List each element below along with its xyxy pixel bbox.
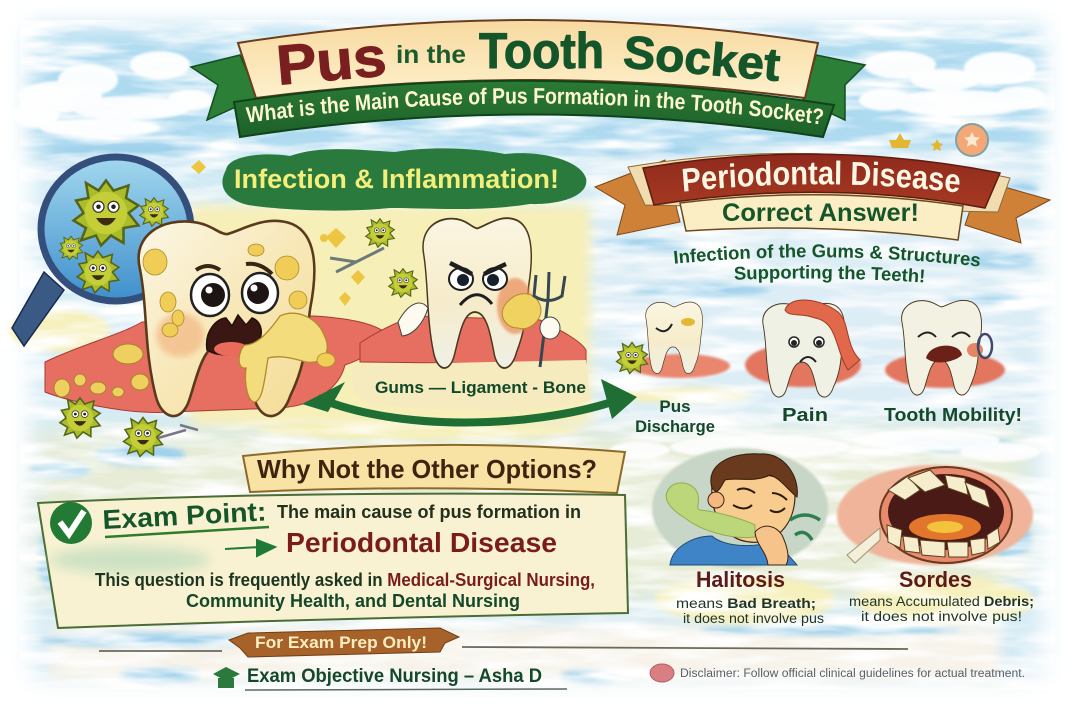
periodontal disease banner	[594, 152, 1052, 244]
angry tooth	[398, 218, 565, 368]
explanation text	[674, 244, 980, 283]
face	[712, 473, 795, 542]
ribbon tail left	[595, 160, 680, 235]
decorative stars and badge	[889, 124, 988, 156]
hand	[755, 526, 788, 565]
pink background	[837, 465, 1033, 565]
brows	[450, 263, 506, 274]
lip and mouth	[880, 467, 1012, 563]
heading text: Periodontal Disease	[682, 160, 960, 192]
title text: Tooth	[479, 23, 604, 79]
bacteria in lens	[59, 180, 168, 293]
pus spots	[143, 244, 335, 367]
cream plank	[680, 195, 963, 240]
halitosis illustration	[652, 448, 828, 568]
yellow sparkles	[191, 160, 365, 306]
disclaimer icon	[650, 664, 674, 682]
panel board	[38, 494, 628, 628]
underline	[105, 527, 269, 537]
hair	[711, 454, 797, 497]
sordes text	[849, 567, 1034, 624]
circle background	[652, 448, 828, 568]
clouds: top right	[859, 51, 1046, 116]
title text: Pus	[274, 24, 389, 97]
left arrowhead	[302, 382, 345, 412]
brows	[196, 264, 272, 274]
right arrowhead	[601, 379, 637, 419]
pus discharge label: Pus	[659, 397, 691, 416]
subtitle text: What is the Main Cause of Pus Formation in the Tooth Socket?	[246, 88, 824, 124]
right eye	[242, 273, 278, 313]
pus blob	[239, 313, 327, 402]
magnifier handle	[12, 272, 64, 346]
small bacteria bottom left	[60, 398, 198, 456]
title text: in the	[396, 41, 466, 69]
heading text: Infection & Inflammation!	[234, 164, 559, 194]
ribbon tail right	[965, 180, 1050, 243]
tooth body	[423, 218, 531, 368]
red board	[643, 154, 1000, 208]
arrow	[225, 540, 275, 556]
sordes text: it does not involve pus!	[861, 609, 1022, 624]
ribbon tail right	[803, 55, 865, 120]
disclaimer	[650, 664, 1025, 682]
disclaimer text: Disclaimer: Follow official clinical guidelines for actual treatment.	[680, 668, 1025, 680]
label: gums ligament bone: Gums — Ligament - Bone	[375, 379, 586, 397]
green cloud shape	[222, 148, 586, 211]
pus drops on gums	[54, 344, 149, 397]
panel: infection illustration background	[190, 205, 590, 425]
upper teeth	[888, 470, 990, 508]
symptom: tooth mobility	[884, 300, 1022, 425]
lens rim	[41, 157, 191, 301]
halitosis text: Halitosis	[696, 567, 785, 592]
pitchfork	[534, 272, 565, 367]
pain label: Pain	[782, 405, 828, 425]
magnifying glass	[12, 157, 191, 346]
cream backing board	[628, 153, 1010, 212]
frequently asked text: This question is frequently asked in Medical-Surgical Nursing,	[95, 570, 595, 590]
heading: infection and inflammation	[222, 148, 586, 211]
banner text: Why Not the Other Options?	[257, 454, 597, 484]
answer: Periodontal Disease	[286, 527, 557, 558]
clouds: middle band	[610, 430, 1040, 461]
title board	[238, 20, 818, 98]
main cause text: The main cause of pus formation in	[277, 502, 581, 522]
subjects text: Community Health, and Dental Nursing	[186, 591, 520, 611]
credit text: Exam Objective Nursing – Asha D	[247, 666, 542, 687]
red swollen gum on tooth	[785, 300, 860, 370]
halitosis text: means Bad Breath;	[676, 596, 816, 611]
graduation cap icon	[213, 667, 240, 688]
arrow between sections	[302, 379, 637, 422]
sordes text: means Accumulated Debris;	[849, 594, 1034, 609]
shirt	[670, 536, 797, 565]
bacterium near tooth	[389, 269, 417, 297]
closed eyes	[733, 489, 787, 512]
check badge	[50, 502, 92, 544]
title text: Socket	[621, 25, 782, 91]
left eye	[191, 274, 229, 316]
mouth	[207, 315, 261, 355]
tongue	[909, 514, 981, 540]
glove hands	[398, 303, 560, 339]
ribbon text: For Exam Prep Only!	[255, 634, 427, 652]
eyes	[449, 268, 507, 290]
flying bacterium with claw	[330, 219, 394, 272]
pale green wash	[50, 546, 210, 574]
sand and gums: right	[351, 316, 590, 411]
symptom: pain	[745, 300, 861, 425]
smell wisps	[790, 515, 820, 540]
dental tool	[847, 528, 880, 563]
clouds: top left	[11, 51, 212, 137]
ribbon tail left	[191, 55, 258, 120]
explanation text: Supporting the Teeth!	[734, 265, 924, 283]
mouth	[460, 295, 492, 305]
exam point panel	[38, 494, 628, 628]
pus on tooth	[502, 294, 541, 329]
halitosis text	[676, 567, 824, 626]
lens	[41, 157, 191, 301]
subtitle band	[234, 81, 834, 137]
explanation text: Infection of the Gums & Structures	[674, 244, 980, 266]
sordes illustration	[837, 465, 1033, 565]
inflamed patch	[497, 278, 533, 334]
title text	[274, 23, 782, 97]
title banner	[189, 19, 866, 138]
sordes text: Sordes	[899, 567, 972, 592]
exam point heading: Exam Point:	[102, 496, 267, 535]
correct answer text: Correct Answer!	[722, 199, 919, 227]
for exam prep ribbon	[229, 628, 459, 657]
author credit	[213, 666, 567, 690]
lower teeth	[887, 525, 1000, 557]
large suffering tooth	[139, 221, 335, 416]
green breath cloud	[666, 483, 755, 538]
pus discharge label: Discharge	[635, 418, 715, 436]
why not the other options banner	[243, 445, 625, 493]
symptom: pus discharge	[616, 302, 730, 436]
tooth body	[139, 221, 314, 416]
footer rule	[99, 647, 908, 651]
tooth mobility label: Tooth Mobility!	[884, 404, 1022, 425]
orange blush	[156, 313, 204, 357]
gums: left	[45, 316, 386, 412]
halitosis text: it does not involve pus	[683, 611, 824, 626]
